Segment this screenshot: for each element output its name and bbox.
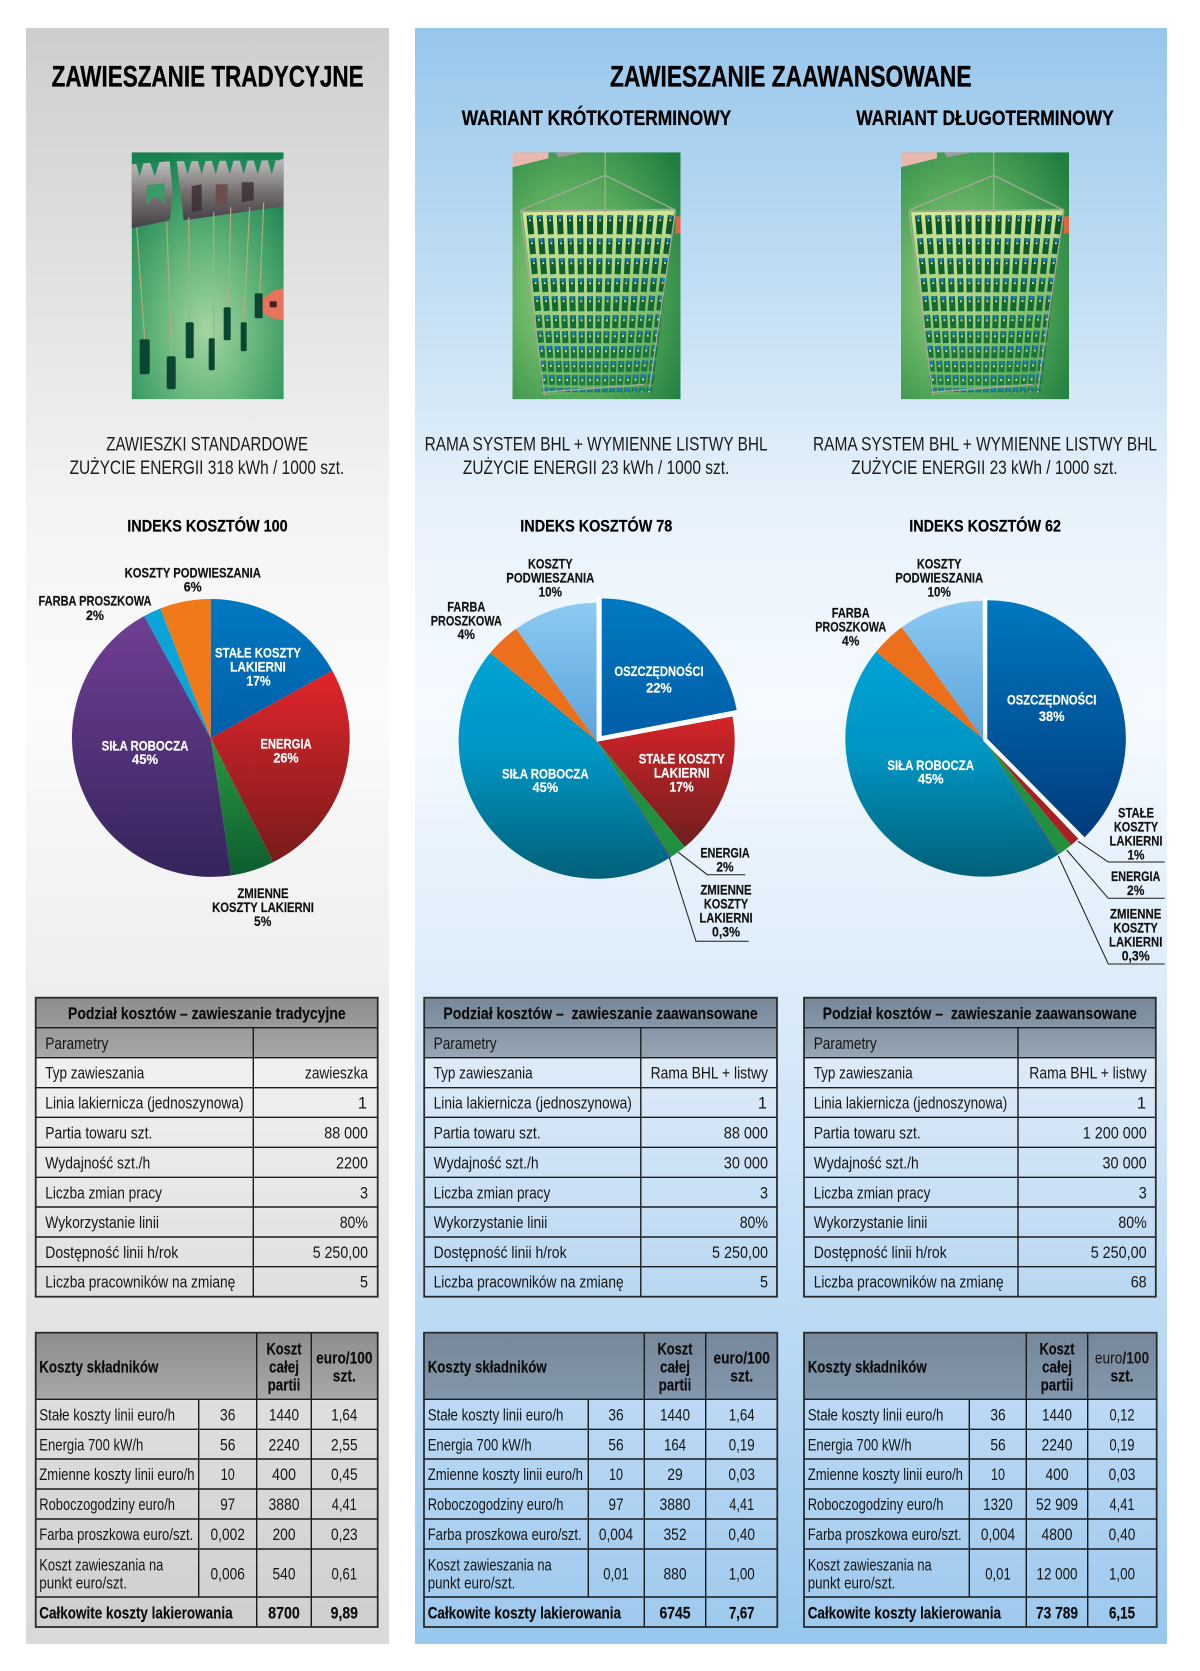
label: hanging costs: [506, 557, 594, 600]
table: component costs traditional: 400: [272, 1466, 296, 1484]
table: component costs traditional: Stałe koszty linii euro/h: [39, 1407, 175, 1425]
table: component costs long-term: euro/100: [1095, 1349, 1149, 1367]
label: hanging costs: [125, 565, 261, 595]
table: component costs traditional: 9,89: [331, 1604, 358, 1622]
table: cost breakdown long-term: 1: [1137, 1095, 1146, 1113]
label: hanging costs: KOSZTY: [528, 557, 573, 572]
table: cost breakdown traditional: 80%: [340, 1214, 368, 1232]
callout: variable costs: 0,3%: [712, 924, 740, 939]
table: component costs traditional: Roboczogodziny euro/h: [39, 1496, 175, 1514]
table: component costs long-term: szt.: [1110, 1368, 1134, 1386]
label: powder paint: FARBA: [832, 606, 870, 621]
table: component costs long-term: 0,01: [985, 1565, 1011, 1583]
label: hanging costs: [895, 557, 983, 600]
table: component costs short-term: 36: [608, 1407, 624, 1425]
table: component costs traditional: całej: [269, 1358, 299, 1376]
table: cost breakdown short-term: 3: [760, 1184, 768, 1202]
table: component costs short-term: 0,40: [728, 1526, 755, 1544]
table: component costs long-term: Energia 700 kW/h: [808, 1436, 912, 1454]
callout: variable costs: ZMIENNE: [700, 883, 752, 898]
table: cost breakdown long-term: 30 000: [1102, 1154, 1147, 1172]
label: fixed line costs: 17%: [670, 780, 694, 795]
label: fixed line costs: LAKIERNI: [230, 659, 286, 674]
table: cost breakdown long-term: 1 200 000: [1083, 1124, 1147, 1142]
table: cost breakdown short-term: Podział kosztów – zawieszanie zaawansowane: [443, 1005, 758, 1023]
table: cost breakdown traditional: Parametry: [45, 1035, 109, 1053]
label: fixed line costs: [639, 751, 725, 795]
table: cost breakdown long-term: Typ zawieszania: [814, 1065, 913, 1083]
table: component costs traditional: 4,41: [332, 1496, 357, 1514]
table: component costs traditional: Koszt zawieszania na: [39, 1556, 164, 1574]
table: component costs traditional: 3880: [268, 1496, 300, 1514]
table: component costs long-term: 12 000: [1036, 1565, 1078, 1583]
label: hanging costs: KOSZTY: [917, 557, 962, 572]
table: component costs long-term: 2240: [1042, 1436, 1072, 1454]
table: cost breakdown traditional: Typ zawieszania: [45, 1065, 145, 1083]
table: component costs long-term: Całkowite koszty lakierowania: [808, 1604, 1002, 1622]
label: powder paint: PROSZKOWA: [815, 620, 886, 635]
table: cost breakdown traditional: Dostępność linii h/rok: [45, 1244, 179, 1262]
label: powder paint: [815, 606, 886, 648]
label: hanging costs: 10%: [539, 585, 562, 600]
label: powder paint: PROSZKOWA: [431, 613, 502, 628]
table: cost breakdown short-term: Partia towaru szt.: [434, 1124, 541, 1142]
table: cost breakdown traditional: 1: [358, 1095, 367, 1113]
label: hanging costs: PODWIESZANIA: [506, 571, 594, 586]
table: component costs long-term: [804, 1333, 1157, 1627]
label: labour: [102, 738, 188, 767]
table: component costs short-term: Stałe koszty linii euro/h: [428, 1407, 563, 1425]
table: cost breakdown traditional: 88 000: [324, 1124, 368, 1142]
table: component costs traditional: 200: [272, 1526, 296, 1544]
table: component costs long-term: 400: [1046, 1466, 1068, 1484]
label: energy: [260, 737, 312, 766]
table: component costs traditional: punkt euro/szt.: [39, 1575, 127, 1593]
label: hanging costs: 6%: [184, 580, 202, 595]
callout: variable costs: 0,3%: [1122, 948, 1150, 963]
table: component costs long-term: 1440: [1042, 1407, 1072, 1425]
table: cost breakdown traditional: 5 250,00: [313, 1244, 368, 1262]
table: component costs short-term: 4,41: [729, 1496, 754, 1514]
table: component costs short-term: 0,03: [728, 1466, 755, 1484]
description: BHL rack short-term: ZUŻYCIE ENERGII 23 kWh / 1000 szt.: [463, 458, 729, 479]
table: component costs long-term: 36: [990, 1407, 1006, 1425]
callout: variable costs: ZMIENNE: [1110, 907, 1161, 922]
table: cost breakdown traditional: [36, 998, 378, 1297]
table: component costs short-term: 97: [608, 1496, 624, 1514]
table: component costs traditional: 10: [221, 1466, 235, 1484]
table: component costs traditional: Całkowite koszty lakierowania: [39, 1604, 233, 1622]
label: labour: SIŁA ROBOCZA: [887, 758, 974, 773]
callout: variable costs: [669, 857, 753, 941]
table: component costs traditional: 540: [272, 1565, 296, 1583]
table: cost breakdown traditional: Partia towaru szt.: [45, 1124, 152, 1142]
label: variable costs: 5%: [254, 914, 271, 929]
label: labour: 45%: [132, 752, 158, 767]
table: component costs short-term: 0,19: [729, 1436, 755, 1454]
column: long-term variant: [804, 106, 1165, 1627]
table: cost breakdown traditional: zawieszka: [305, 1065, 369, 1083]
table: component costs long-term: 0,40: [1109, 1526, 1135, 1544]
table: cost breakdown traditional: Podział kosztów – zawieszanie tradycyjne: [68, 1005, 346, 1023]
table: cost breakdown short-term: Dostępność linii h/rok: [434, 1244, 567, 1262]
table: cost breakdown short-term: Parametry: [434, 1035, 497, 1053]
table: cost breakdown traditional: 5: [360, 1274, 368, 1292]
table: component costs traditional: partii: [268, 1377, 300, 1395]
table: component costs long-term: 0,19: [1110, 1436, 1134, 1454]
label: fixed line costs: [215, 646, 301, 688]
callout: fixed line costs: LAKIERNI: [1110, 833, 1162, 848]
label: variable costs: KOSZTY LAKIERNI: [212, 900, 314, 915]
table: cost breakdown short-term: 1: [758, 1095, 767, 1113]
table: component costs short-term: 1440: [660, 1407, 690, 1425]
pie chart: short-term costs: [431, 557, 753, 941]
callout: fixed line costs: STAŁE: [1118, 806, 1154, 821]
callout: energy: [1067, 850, 1165, 898]
table: component costs traditional: 0,61: [332, 1565, 357, 1583]
description: standard hangers: [70, 435, 344, 479]
table: component costs short-term: 7,67: [729, 1604, 754, 1622]
heading: cost index 100: INDEKS KOSZTÓW 100: [127, 516, 288, 535]
table: component costs traditional: 2,55: [331, 1436, 358, 1454]
table: cost breakdown short-term: Rama BHL + listwy: [651, 1065, 769, 1083]
callout: energy: 2%: [1127, 883, 1144, 898]
table: component costs short-term: Energia 700 kW/h: [428, 1436, 532, 1454]
table: component costs long-term: Roboczogodziny euro/h: [808, 1496, 943, 1514]
table: cost breakdown long-term: Podział kosztów – zawieszanie zaawansowane: [823, 1005, 1137, 1023]
table: cost breakdown short-term: Wydajność szt./h: [434, 1154, 539, 1172]
table: component costs long-term: 56: [990, 1436, 1006, 1454]
table: component costs traditional: 36: [220, 1407, 235, 1425]
table: cost breakdown traditional: 3: [360, 1184, 368, 1202]
description: BHL rack long-term: [813, 435, 1157, 479]
callout: energy: ENERGIA: [700, 846, 750, 861]
label: labour: 45%: [918, 772, 944, 787]
table: component costs long-term: Koszt: [1040, 1340, 1075, 1358]
callout: fixed line costs: [1078, 806, 1165, 862]
table: cost breakdown traditional: Liczba zmian pracy: [45, 1184, 163, 1202]
label: savings: OSZCZĘDNOŚCI: [1007, 691, 1096, 708]
table: component costs long-term: Koszty składników: [808, 1358, 927, 1376]
table: cost breakdown short-term: [424, 998, 777, 1297]
table: cost breakdown traditional: 2200: [336, 1154, 368, 1172]
table: component costs traditional: 0,23: [331, 1526, 358, 1544]
table: cost breakdown long-term: 5 250,00: [1091, 1244, 1147, 1262]
pie chart: long-term costs: [815, 557, 1165, 964]
photo: BHL rack long-term: [901, 152, 1069, 399]
table: cost breakdown short-term: Liczba pracowników na zmianę: [434, 1274, 624, 1292]
table: component costs short-term: Farba proszkowa euro/szt.: [428, 1526, 582, 1544]
table: cost breakdown traditional: Linia lakiernicza (jednoszynowa): [45, 1095, 244, 1113]
table: component costs short-term: 10: [609, 1466, 623, 1484]
table: component costs short-term: szt.: [730, 1368, 753, 1386]
description: standard hangers: ZUŻYCIE ENERGII 318 kWh / 1000 szt.: [70, 458, 344, 479]
table: cost breakdown short-term: 5 250,00: [712, 1244, 768, 1262]
photo: BHL rack: [512, 152, 680, 399]
table: component costs long-term: 4,41: [1110, 1496, 1134, 1514]
table: component costs short-term: 56: [608, 1436, 624, 1454]
title: traditional: ZAWIESZANIE TRADYCYJNE: [52, 61, 364, 94]
table: component costs long-term: partii: [1041, 1377, 1073, 1395]
label: labour: [502, 766, 589, 795]
table: component costs traditional: Farba proszkowa euro/szt.: [39, 1526, 193, 1544]
label: savings: OSZCZĘDNOŚCI: [614, 662, 704, 679]
label: labour: SIŁA ROBOCZA: [102, 738, 188, 753]
table: component costs traditional: 97: [220, 1496, 235, 1514]
label: powder paint: 2%: [86, 608, 104, 623]
table: cost breakdown short-term: Liczba zmian pracy: [434, 1184, 551, 1202]
table: cost breakdown long-term: Dostępność linii h/rok: [814, 1244, 947, 1262]
table: component costs traditional: [36, 1333, 378, 1627]
table: component costs short-term: 0,004: [599, 1526, 633, 1544]
label: fixed line costs: STAŁE KOSZTY: [215, 646, 301, 661]
table: component costs short-term: 164: [664, 1436, 686, 1454]
callout: fixed line costs: 1%: [1128, 847, 1144, 862]
table: component costs traditional: 0,002: [211, 1526, 245, 1544]
photo: standard hangers: [132, 152, 284, 399]
table: component costs long-term: 0,12: [1110, 1407, 1134, 1425]
table: component costs long-term: Zmienne koszty linii euro/h: [808, 1466, 963, 1484]
callout: variable costs: KOSZTY: [1114, 921, 1158, 936]
table: component costs long-term: 73 789: [1036, 1604, 1078, 1622]
table: cost breakdown short-term: Linia lakiernicza (jednoszynowa): [434, 1095, 632, 1113]
table: component costs traditional: Energia 700 kW/h: [39, 1436, 143, 1454]
table: component costs long-term: 0,03: [1109, 1466, 1135, 1484]
table: component costs long-term: Stałe koszty linii euro/h: [808, 1407, 943, 1425]
table: cost breakdown traditional: Liczba pracowników na zmianę: [45, 1274, 235, 1292]
table: component costs short-term: 1,00: [729, 1565, 755, 1583]
table: component costs short-term: Zmienne koszty linii euro/h: [428, 1466, 583, 1484]
callout: variable costs: LAKIERNI: [699, 910, 753, 925]
label: powder paint: 4%: [842, 633, 859, 648]
table: cost breakdown short-term: Wykorzystanie linii: [434, 1214, 547, 1232]
title: advanced: ZAWIESZANIE ZAAWANSOWANE: [610, 61, 972, 94]
table: component costs traditional: 1,64: [331, 1407, 357, 1425]
label: fixed line costs: 17%: [246, 673, 271, 688]
table: cost breakdown long-term: 3: [1139, 1184, 1147, 1202]
label: labour: [887, 758, 974, 787]
table: component costs short-term: [424, 1333, 777, 1627]
table: cost breakdown long-term: Rama BHL + listwy: [1029, 1065, 1147, 1083]
callout: variable costs: LAKIERNI: [1109, 934, 1162, 949]
table: component costs short-term: Całkowite koszty lakierowania: [428, 1604, 622, 1622]
table: component costs short-term: 0,01: [603, 1565, 629, 1583]
label: powder paint: [38, 594, 152, 623]
label: variable costs: [212, 886, 314, 929]
label: hanging costs: PODWIESZANIA: [895, 571, 983, 586]
callout: variable costs: [1058, 856, 1165, 964]
label: hanging costs: 10%: [928, 585, 951, 600]
panel: traditional hanging: [26, 28, 389, 1644]
column: short-term variant: [424, 105, 777, 1627]
label: powder paint: FARBA PROSZKOWA: [38, 594, 152, 609]
table: component costs short-term: punkt euro/szt.: [428, 1575, 515, 1593]
table: component costs traditional: 0,006: [211, 1565, 245, 1583]
table: cost breakdown long-term: Linia lakiernicza (jednoszynowa): [814, 1095, 1007, 1113]
table: component costs traditional: 8700: [268, 1604, 300, 1622]
callout: energy: ENERGIA: [1111, 869, 1160, 884]
label: savings: 22%: [646, 680, 672, 695]
table: cost breakdown short-term: 30 000: [724, 1154, 768, 1172]
label: energy: 26%: [273, 751, 299, 766]
table: cost breakdown long-term: Liczba zmian pracy: [814, 1184, 931, 1202]
label: variable costs: ZMIENNE: [237, 886, 289, 901]
callout: energy: 2%: [716, 860, 734, 875]
table: component costs short-term: Koszt zawieszania na: [428, 1556, 552, 1574]
table: cost breakdown long-term: [804, 998, 1156, 1297]
table: component costs short-term: 29: [667, 1466, 683, 1484]
table: component costs traditional: 2240: [268, 1436, 300, 1454]
table: cost breakdown traditional: Wydajność szt./h: [45, 1154, 150, 1172]
table: cost breakdown long-term: Liczba pracowników na zmianę: [814, 1274, 1004, 1292]
table: cost breakdown long-term: Parametry: [814, 1035, 877, 1053]
label: labour: 45%: [532, 780, 558, 795]
table: component costs short-term: euro/100: [714, 1349, 770, 1367]
heading: cost index 62: INDEKS KOSZTÓW 62: [909, 516, 1061, 535]
table: cost breakdown traditional: Wykorzystanie linii: [45, 1214, 159, 1232]
table: component costs traditional: Zmienne koszty linii euro/h: [39, 1466, 195, 1484]
table: component costs long-term: całej: [1042, 1358, 1072, 1376]
label: labour: SIŁA ROBOCZA: [502, 766, 589, 781]
table: cost breakdown short-term: 88 000: [724, 1124, 768, 1142]
table: component costs short-term: 3880: [660, 1496, 690, 1514]
table: cost breakdown short-term: 80%: [740, 1214, 768, 1232]
table: component costs long-term: 1,00: [1109, 1565, 1135, 1583]
heading: cost index 78: INDEKS KOSZTÓW 78: [520, 516, 672, 535]
table: cost breakdown long-term: 68: [1131, 1274, 1147, 1292]
table: cost breakdown short-term: 5: [760, 1274, 768, 1292]
table: cost breakdown long-term: Partia towaru szt.: [814, 1124, 921, 1142]
table: component costs short-term: 880: [664, 1565, 686, 1583]
label: savings: [1007, 691, 1096, 724]
table: component costs traditional: Koszty składników: [39, 1358, 158, 1376]
table: component costs short-term: Roboczogodziny euro/h: [428, 1496, 563, 1514]
table: component costs long-term: 10: [991, 1466, 1005, 1484]
pie chart: traditional costs: [38, 565, 350, 929]
table: component costs short-term: Koszty składników: [428, 1358, 547, 1376]
callout: fixed line costs: KOSZTY: [1114, 819, 1158, 834]
description: BHL rack short-term: [425, 435, 768, 479]
description: BHL rack long-term: ZUŻYCIE ENERGII 23 kWh / 1000 szt.: [851, 458, 1118, 479]
table: component costs traditional: Koszt: [266, 1340, 302, 1358]
label: savings: [614, 662, 704, 695]
label: energy: ENERGIA: [260, 737, 312, 752]
table: component costs traditional: 56: [220, 1436, 235, 1454]
table: component costs long-term: 4800: [1042, 1526, 1072, 1544]
table: component costs long-term: 1320: [983, 1496, 1013, 1514]
table: cost breakdown short-term: Typ zawieszania: [434, 1065, 533, 1083]
label: fixed line costs: LAKIERNI: [654, 765, 710, 780]
table: component costs long-term: punkt euro/szt.: [808, 1575, 895, 1593]
description: BHL rack short-term: RAMA SYSTEM BHL + WYMIENNE LISTWY BHL: [425, 435, 768, 456]
table: component costs short-term: partii: [659, 1377, 691, 1395]
table: component costs short-term: Koszt: [658, 1340, 693, 1358]
table: component costs long-term: 0,004: [981, 1526, 1015, 1544]
table: component costs short-term: 352: [664, 1526, 686, 1544]
label: fixed line costs: STAŁE KOSZTY: [639, 751, 725, 766]
description: standard hangers: ZAWIESZKI STANDARDOWE: [106, 435, 308, 456]
table: component costs short-term: 6745: [660, 1604, 690, 1622]
table: component costs long-term: Koszt zawieszania na: [808, 1556, 932, 1574]
table: cost breakdown long-term: 80%: [1118, 1214, 1147, 1232]
callout: variable costs: KOSZTY: [704, 897, 748, 912]
label: powder paint: [431, 599, 502, 642]
table: component costs traditional: 0,45: [331, 1466, 358, 1484]
label: savings: 38%: [1039, 709, 1065, 724]
table: component costs long-term: 52 909: [1036, 1496, 1078, 1514]
heading: short-term variant: WARIANT KRÓTKOTERMINOWY: [462, 105, 731, 130]
heading: long-term variant: WARIANT DŁUGOTERMINOWY: [856, 106, 1114, 130]
table: cost breakdown long-term: Wykorzystanie linii: [814, 1214, 927, 1232]
table: component costs long-term: 6,15: [1109, 1604, 1135, 1622]
table: cost breakdown long-term: Wydajność szt./h: [814, 1154, 919, 1172]
label: hanging costs: KOSZTY PODWIESZANIA: [125, 565, 261, 580]
table: component costs short-term: 1,64: [729, 1407, 755, 1425]
table: component costs traditional: euro/100: [316, 1349, 372, 1367]
label: powder paint: FARBA: [447, 599, 485, 614]
panel: advanced hanging: [415, 28, 1167, 1644]
table: component costs short-term: całej: [660, 1358, 690, 1376]
table: component costs long-term: Farba proszkowa euro/szt.: [808, 1526, 962, 1544]
table: component costs traditional: 1440: [269, 1407, 299, 1425]
callout: energy: [678, 846, 750, 875]
label: powder paint: 4%: [458, 627, 475, 642]
table: component costs traditional: szt.: [333, 1368, 356, 1386]
